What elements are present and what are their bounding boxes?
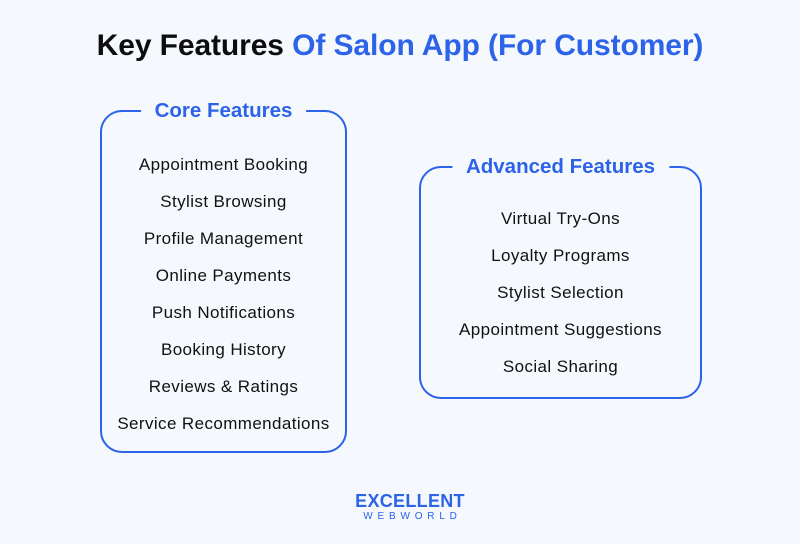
list: core features: Online Payments: [156, 266, 291, 285]
list: core features: Appointment Booking: [139, 155, 308, 174]
title: Key Features Of Salon App (For Customer): [97, 29, 703, 62]
list: core features: Service Recommendations: [117, 414, 330, 433]
list: core features: [117, 155, 330, 433]
list: advanced features: Stylist Selection: [497, 283, 624, 302]
logo: EXCELLENT: [355, 491, 465, 511]
list: core features: Stylist Browsing: [160, 192, 287, 211]
list: core features: Reviews & Ratings: [149, 377, 298, 396]
list: advanced features: Appointment Suggestions: [459, 320, 662, 339]
logo: [355, 491, 465, 522]
list: advanced features: [459, 209, 662, 376]
list: advanced features: Social Sharing: [503, 357, 618, 376]
panel: core features: [100, 110, 347, 453]
list: core features: Profile Management: [144, 229, 303, 248]
list: core features: Booking History: [161, 340, 286, 359]
list: advanced features: Virtual Try-Ons: [501, 209, 620, 228]
heading: advanced features: Advanced Features: [466, 155, 655, 178]
list: advanced features: Loyalty Programs: [491, 246, 630, 265]
heading: core features: Core Features: [155, 99, 292, 122]
logo: WEBWORLD: [363, 511, 462, 522]
panel: advanced features: [419, 166, 702, 399]
list: core features: Push Notifications: [152, 303, 295, 322]
